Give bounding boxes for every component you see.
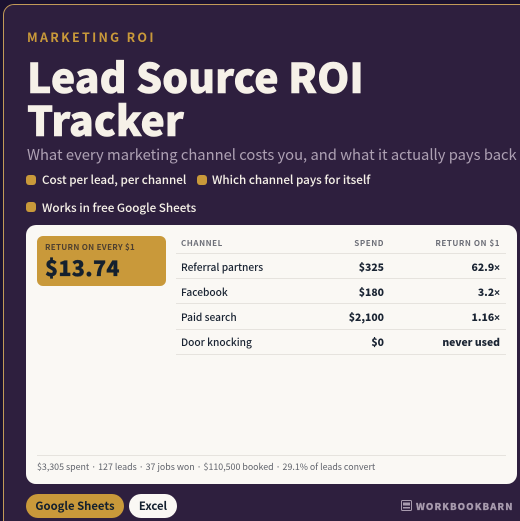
feature: cost per lead: Cost per lead, per channel: [42, 171, 186, 188]
button: google sheets: Google Sheets: [35, 498, 115, 514]
title: Lead Source ROI: [27, 45, 364, 105]
bullet: google sheets: [26, 202, 36, 212]
row: referral partners: Referral partners: [181, 259, 263, 274]
spend: referral partners: $325: [359, 259, 384, 274]
return: paid search: 1.16×: [472, 309, 500, 324]
button: excel: [129, 494, 177, 518]
feature list: [26, 171, 371, 216]
return: referral partners: 62.9×: [472, 259, 500, 274]
button: excel: Excel: [139, 498, 167, 514]
bullet: cost per lead: [26, 175, 36, 185]
return: facebook: 3.2×: [478, 284, 500, 299]
row: paid search: Paid search: [181, 309, 237, 324]
column header: spend: SPEND: [354, 238, 384, 249]
column header: channel: CHANNEL: [181, 238, 223, 249]
summary footnote: $3,305 spent · 127 leads · 37 jobs won · $110,500 booked · 29.1% of leads convert: [37, 460, 375, 473]
row: facebook: Facebook: [181, 284, 228, 299]
callout label: RETURN ON EVERY $1: [45, 242, 135, 253]
row: door knocking: Door knocking: [181, 334, 252, 349]
brand: workbookbarn: [401, 499, 514, 513]
callout: return on every dollar: [37, 236, 166, 286]
spend: door knocking: $0: [371, 334, 384, 349]
title: [27, 45, 364, 148]
icon: workbook: [401, 500, 412, 511]
table: channels: [176, 238, 506, 355]
panel: data card: [26, 225, 517, 484]
feature: pays for itself: Which channel pays for itself: [212, 171, 370, 188]
column header: return: RETURN ON $1: [435, 238, 500, 249]
bullet: pays for itself: [197, 175, 207, 185]
title: Tracker: [27, 88, 184, 148]
spend: facebook: $180: [359, 284, 384, 299]
spend: paid search: $2,100: [349, 309, 384, 324]
eyebrow: MARKETING ROI: [27, 27, 156, 46]
subtitle: What every marketing channel costs you, and what it actually pays back: [27, 144, 517, 165]
feature: google sheets: Works in free Google Sheets: [42, 199, 196, 216]
return: door knocking: never used: [442, 334, 500, 349]
callout value: $13.74: [45, 252, 120, 283]
brand name: WORKBOOKBARN: [416, 499, 514, 513]
button: google sheets: [26, 494, 124, 518]
